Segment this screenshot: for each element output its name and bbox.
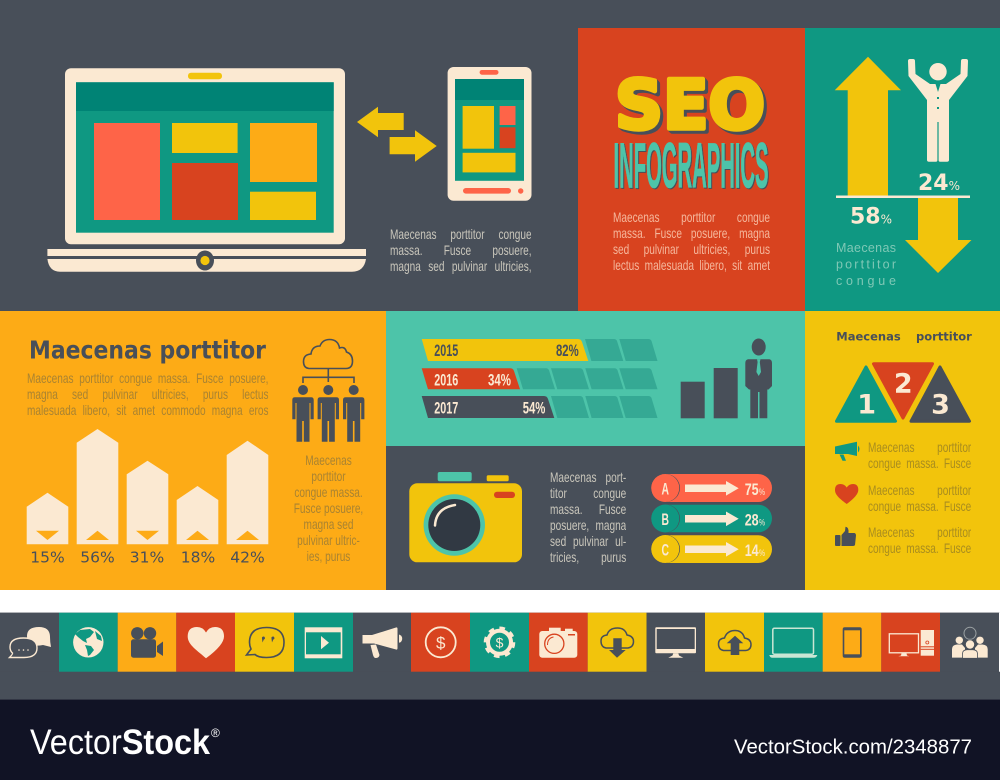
heading: Maecenas porttitor: Maecenas porttitor bbox=[29, 336, 267, 365]
text block: SEO description: massa. Fusce posuere, magna bbox=[613, 225, 770, 241]
bar chart: 18% bbox=[181, 549, 215, 567]
icon: cheering businessman bbox=[908, 59, 968, 162]
text block: arrows caption bbox=[836, 241, 896, 288]
text block: thumb item bbox=[868, 524, 971, 558]
tile: video camera bbox=[118, 613, 176, 672]
tile: chat bbox=[0, 613, 59, 672]
text block: team caption: Fusce posuere, bbox=[294, 500, 363, 516]
tile: gear dollar bbox=[470, 613, 529, 672]
tile: meeting people bbox=[940, 613, 999, 672]
text block: heart item: congue massa. Fusce bbox=[868, 498, 971, 514]
pill: B 28%: 28 bbox=[745, 510, 759, 530]
footer: watermark bar bbox=[0, 700, 1000, 780]
tile: dollar coin bbox=[411, 613, 470, 672]
bar: 2016: 34% bbox=[488, 371, 511, 389]
pill: A 75%: A bbox=[662, 480, 669, 498]
tile: speech bubble bbox=[235, 613, 294, 672]
text block: orange description: Maecenas porttitor congue massa. Fusce posuere, bbox=[27, 370, 268, 386]
progress cells bbox=[517, 339, 658, 418]
text block: SEO description: Maecenas porttitor congue bbox=[613, 209, 770, 225]
stat: 58%: 58% bbox=[850, 204, 892, 229]
text block: SEO description: sed pulvinar ultricies, purus bbox=[613, 241, 770, 257]
text block: thumb item: Maecenas porttitor bbox=[868, 524, 971, 540]
text block: orange description: malesuada libero, sit amet commodo magna eros bbox=[27, 402, 268, 418]
text block: team caption: congue massa. bbox=[294, 484, 363, 500]
text block: devices caption: magna sed pulvinar ultricies, bbox=[390, 258, 531, 274]
bar chart: 42% bbox=[230, 549, 265, 567]
bar: 2017: 2017 bbox=[434, 400, 458, 418]
text block: camera caption: posuere, magna bbox=[550, 517, 626, 533]
icon strip bbox=[0, 613, 1000, 672]
tile: video player bbox=[294, 613, 353, 672]
bar: 2015: 82% bbox=[556, 342, 579, 360]
icon: camera bbox=[409, 472, 522, 562]
pill: C 14% bbox=[651, 535, 772, 563]
text block: devices caption bbox=[390, 226, 531, 276]
triangle: 2: 2 bbox=[894, 369, 913, 400]
bar: 2017 bbox=[422, 396, 554, 418]
text block: megaphone item: Maecenas porttitor bbox=[868, 439, 971, 455]
icon: phone bbox=[448, 67, 532, 201]
text block: team caption: Maecenas bbox=[305, 452, 352, 468]
icon: cloud team bbox=[292, 340, 364, 442]
panel: SEO title bbox=[578, 28, 805, 311]
text block: megaphone item bbox=[868, 439, 971, 473]
text block: heart item bbox=[868, 482, 971, 516]
text block: camera caption bbox=[550, 469, 626, 567]
triangle: 1 bbox=[836, 367, 896, 421]
text block: team caption bbox=[285, 452, 372, 566]
triangle: 3 bbox=[911, 367, 970, 421]
tile: smartphone bbox=[823, 613, 881, 672]
icon: businessman with bars bbox=[681, 338, 772, 418]
text block: devices caption: Maecenas porttitor congue bbox=[390, 226, 531, 242]
panel: camera and pills bbox=[386, 446, 805, 590]
triangle: 3: 3 bbox=[931, 389, 950, 420]
registered mark: ® bbox=[211, 726, 220, 740]
pill: C 14%: C bbox=[662, 542, 669, 560]
text block: arrows caption: Maecenas bbox=[836, 241, 896, 255]
pill: C 14%: 14 bbox=[745, 541, 759, 560]
icon: heart bbox=[835, 484, 858, 504]
pill: B 28%: B bbox=[662, 511, 669, 529]
bar: 2017: 54% bbox=[523, 400, 546, 418]
text block: devices caption: massa. Fusce posuere, bbox=[390, 242, 531, 258]
triangle: 1: 1 bbox=[857, 389, 876, 420]
text block: team caption: magna sed bbox=[304, 516, 353, 532]
icon: thumbs up bbox=[835, 527, 856, 546]
tile: globe bbox=[59, 613, 118, 672]
heading: Maecenas porttitor: Maecenas bbox=[836, 330, 901, 344]
text block: orange description bbox=[27, 370, 268, 420]
tile: heart bbox=[176, 613, 235, 672]
text block: team caption: pulvinar ultric- bbox=[297, 532, 360, 548]
pill: B 28%: % bbox=[759, 518, 765, 528]
text block: camera caption: tricies, purus bbox=[550, 549, 626, 565]
pill: A 75%: 75 bbox=[745, 480, 759, 499]
bar chart: 15% bbox=[30, 549, 65, 567]
tile: dollar coin: $ bbox=[436, 634, 446, 652]
bar chart: 56% bbox=[80, 549, 115, 567]
bar: 2015: 2015 bbox=[434, 342, 458, 360]
bar: 2016: 2016 bbox=[434, 371, 458, 389]
pill: A 75%: % bbox=[759, 487, 765, 497]
text block: megaphone item: congue massa. Fusce bbox=[868, 455, 971, 471]
tile: cloud upload bbox=[705, 613, 764, 672]
heading: SEO: SEO bbox=[615, 66, 765, 146]
text block: camera caption: sed pulvinar ul- bbox=[550, 533, 626, 549]
tile: megaphone bbox=[353, 613, 411, 672]
icon: megaphone bbox=[835, 442, 860, 461]
tile: monitor bbox=[646, 613, 705, 672]
icon: sync arrows bbox=[357, 107, 437, 162]
panel: up and down arrows bbox=[805, 28, 1000, 311]
panel: devices bbox=[0, 28, 578, 311]
bar chart: 31% bbox=[130, 549, 164, 567]
text block: arrows caption: congue bbox=[836, 274, 896, 288]
icon: down arrow bbox=[905, 198, 972, 273]
bar: 2016 bbox=[422, 368, 520, 389]
text block: orange description: magna sed pulvinar ultricies, purus lectus bbox=[27, 386, 268, 402]
bar chart bbox=[27, 429, 268, 567]
tile: desktop computer bbox=[881, 613, 940, 672]
icon: up arrow bbox=[835, 57, 901, 197]
tile: gear dollar: $ bbox=[496, 634, 504, 650]
tile: cloud download bbox=[588, 613, 646, 672]
tile: camera bbox=[529, 613, 588, 672]
icon: laptop bbox=[47, 68, 366, 272]
triangle: 2 bbox=[874, 364, 932, 418]
logo: VectorStock: VectorStock bbox=[30, 723, 210, 762]
text block: SEO description bbox=[613, 209, 770, 275]
text block: camera caption: massa. Fusce bbox=[550, 501, 626, 517]
text block: arrows caption: porttitor bbox=[836, 258, 896, 272]
text block: camera caption: Maecenas port- bbox=[550, 469, 626, 485]
text block: camera caption: titor congue bbox=[550, 485, 626, 501]
stat: 24%: 24% bbox=[918, 171, 960, 196]
panel: orange chart bbox=[0, 311, 386, 590]
panel: progress bars bbox=[386, 311, 805, 446]
bar: 2015 bbox=[422, 339, 588, 361]
pill: C 14%: % bbox=[759, 548, 765, 558]
heading: Maecenas porttitor: porttitor bbox=[916, 330, 972, 344]
panel: ranking bbox=[805, 311, 1000, 590]
image id: VectorStock.com/2348877 bbox=[734, 736, 972, 758]
tile: laptop bbox=[764, 613, 823, 672]
pill: A 75% bbox=[651, 474, 772, 502]
text block: team caption: porttitor bbox=[311, 468, 346, 484]
pill: B 28% bbox=[651, 504, 772, 532]
text block: team caption: ies, purus bbox=[307, 548, 350, 564]
text block: thumb item: congue massa. Fusce bbox=[868, 540, 971, 556]
text block: SEO description: lectus malesuada libero, sit amet bbox=[613, 257, 770, 273]
text block: heart item: Maecenas porttitor bbox=[868, 482, 971, 498]
